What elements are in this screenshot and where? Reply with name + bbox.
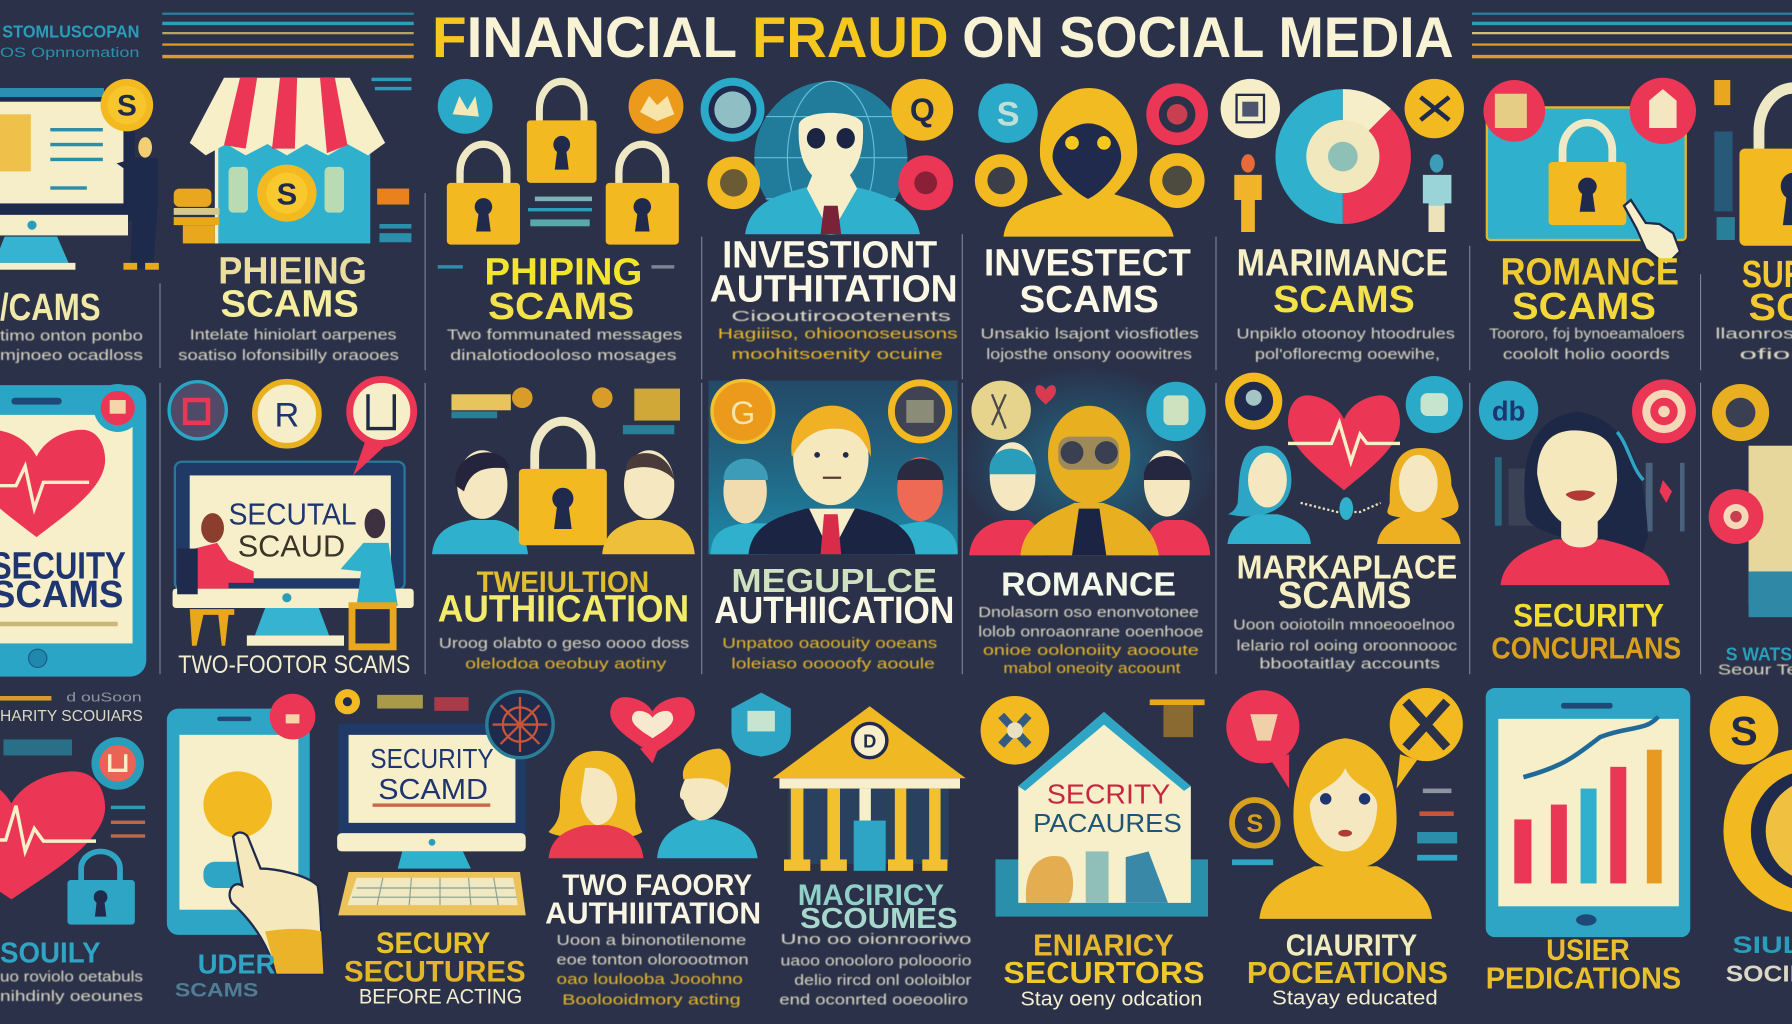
icon badges	[1225, 373, 1463, 433]
small lines	[438, 197, 674, 269]
heading: SCAMS	[1273, 278, 1415, 320]
icon: red bubble	[1226, 690, 1299, 789]
description: lolob onroaonrane ooenhooe	[978, 625, 1203, 641]
icon: woman	[1259, 738, 1432, 919]
panel: row 2 col 1 phone heart	[0, 384, 146, 677]
heading	[710, 233, 958, 310]
heading: SCAMS	[1019, 278, 1159, 320]
panel: row 1 col 7 lock and cursor	[1483, 78, 1696, 363]
text	[1718, 644, 1792, 678]
description: llaonrosn	[1715, 326, 1792, 342]
heading: INVESTECT	[984, 241, 1191, 283]
heading: TWEIULTION	[477, 566, 649, 599]
heading: SECURY	[376, 927, 490, 960]
icon: phone	[0, 385, 146, 677]
description: Two fommunated messages	[447, 327, 682, 343]
top-left caption: STOMLUSCOPAN	[2, 22, 139, 42]
icon: badge	[91, 737, 144, 790]
heading	[438, 566, 689, 630]
icon: house text: SECRITY	[1047, 778, 1170, 809]
icon badges	[971, 381, 1206, 441]
small bars	[3, 739, 145, 838]
top text: d ouSoon	[66, 691, 142, 705]
icon: screen text	[229, 497, 357, 564]
icon: coin: S	[1730, 708, 1758, 754]
icon badges: db	[1492, 396, 1525, 427]
description	[439, 636, 689, 673]
icon badges	[1479, 379, 1696, 443]
panel: row 2 col 3 lock and people	[432, 387, 695, 673]
panel: row 2 col 5 masked villain	[957, 366, 1219, 677]
description: Uno oo oionrooriwo	[781, 932, 971, 948]
heading: SCAMS	[221, 283, 359, 325]
label: TWO-FOOTOR SCAMS	[178, 651, 410, 679]
description	[557, 933, 749, 1009]
heading	[1486, 934, 1681, 996]
icon: store: S	[277, 177, 297, 212]
heading: SCAMS	[488, 285, 634, 327]
heading: SIUL	[1733, 932, 1792, 959]
heading	[485, 251, 642, 327]
icon: masked figure	[1021, 406, 1159, 555]
label: Stayay educated	[1272, 987, 1438, 1010]
top-left caption: OS Opnnomation	[0, 45, 139, 60]
icon badges: R	[274, 396, 299, 434]
panel: row 1 col 5 hooded figure	[975, 83, 1208, 363]
description: Uoon ooiotoiln mnoeooelnoo	[1233, 618, 1455, 634]
top-left caption	[0, 22, 139, 60]
heading: AUTHIICATION	[714, 589, 954, 631]
panel: row 2 col 2 monitor	[169, 379, 414, 679]
label: Stay oeny odcation	[1021, 988, 1202, 1011]
description	[0, 970, 143, 1005]
heading: USIER	[1546, 934, 1630, 967]
chart: trend line	[1523, 717, 1658, 777]
icon badges	[1483, 78, 1696, 144]
icon: large ring	[1723, 749, 1792, 913]
icon: screen text: SECUTAL	[229, 497, 357, 532]
icon: padlock	[1549, 123, 1626, 225]
heading: ENIARICY	[1033, 927, 1174, 962]
teal backdrop	[709, 381, 958, 554]
icon: padlock right	[606, 144, 679, 245]
heading: SCAMS	[1278, 574, 1411, 616]
description	[1233, 618, 1458, 673]
icon badges	[975, 83, 1208, 208]
icon: house	[995, 712, 1208, 917]
icon: screen	[1487, 107, 1686, 240]
panel: row 2 col 4 businessman	[709, 381, 958, 673]
heading	[1247, 927, 1448, 990]
heading: ROMANCE	[1001, 566, 1176, 603]
description: Toororo, foj bynoeamaloers	[1489, 326, 1685, 342]
description: Unpatoo oaoouity ooeans	[722, 636, 937, 652]
side bars	[1232, 789, 1457, 865]
description: uo roviolo oetabuls	[0, 970, 143, 986]
small icons	[451, 387, 680, 434]
description: Unpiklo otoonoy htoodrules	[1237, 326, 1455, 342]
heading: SCOUMES	[800, 903, 958, 935]
icon: lower tint	[1749, 571, 1792, 617]
description: delio rircd onl ooloiblor	[794, 973, 971, 989]
heading: SECUTURES	[344, 956, 526, 989]
icon: heart	[1288, 395, 1400, 490]
heading: SOUILY	[0, 937, 101, 969]
panel: row 3 col 3 monitor keyboard	[335, 689, 553, 1008]
heading: SCAMS	[1512, 285, 1656, 327]
description	[1715, 326, 1792, 363]
panel: row 1 col 4 impersonator	[701, 78, 958, 363]
icon: cream panel	[1749, 446, 1792, 606]
icon badges: Q	[910, 92, 935, 128]
heading: AUTHITATION	[710, 268, 958, 310]
icon: screen text	[370, 743, 494, 807]
panel: row 3 col 9	[1710, 696, 1792, 987]
description: Uoon a binonotilenome	[557, 933, 746, 949]
heading: MEGUPLCE	[731, 563, 937, 600]
icon: coin	[203, 771, 272, 838]
text: Seour Te	[1718, 662, 1792, 678]
heading	[0, 544, 126, 615]
icon: figures	[1234, 154, 1451, 232]
side icons	[174, 78, 411, 243]
description: uaoo onooloro polooorio	[781, 954, 971, 970]
heading: PEDICATIONS	[1486, 961, 1681, 996]
description: Unsakio lsajont viosfiotles	[981, 326, 1199, 342]
icon: badge	[94, 384, 142, 432]
chart: bars	[1514, 750, 1662, 883]
icon: woman right	[1377, 448, 1461, 544]
icon: coin ring: S	[1246, 810, 1263, 838]
icon: coin	[1710, 696, 1778, 765]
icon: central man	[749, 406, 915, 554]
icon: house text	[1033, 778, 1182, 838]
description: Boolooidmory acting	[562, 993, 741, 1009]
icon: teal shield	[731, 693, 791, 757]
icon: monitor	[0, 88, 135, 270]
line	[0, 622, 118, 626]
panel: row 1 col 1 monitor	[0, 79, 159, 364]
description: olelodoa oeobuy aotiny	[465, 657, 667, 673]
icon: masked person	[745, 113, 920, 234]
description	[981, 326, 1199, 363]
panel: row 2 col 8	[1709, 384, 1792, 678]
description: oao loulooba Jooohno	[557, 972, 743, 988]
description: ofion	[1739, 347, 1792, 363]
icon: side men	[969, 442, 1210, 555]
icon badges	[1221, 79, 1464, 138]
icon badges	[712, 381, 949, 442]
icon: woman	[1501, 411, 1670, 585]
heading	[344, 927, 526, 989]
small icons	[335, 689, 469, 714]
icon: woman	[549, 751, 643, 858]
description	[1489, 326, 1685, 363]
description	[718, 309, 958, 363]
heading	[545, 869, 761, 930]
icon: hand	[230, 833, 323, 974]
icon badges	[169, 379, 414, 475]
heading	[714, 563, 954, 631]
heading: AUTHIICATION	[438, 588, 689, 630]
description	[722, 636, 937, 673]
title: FINANCIAL	[432, 6, 737, 70]
title	[432, 6, 1454, 70]
description: eoe tonton oloroootmon	[557, 953, 749, 969]
heading: AUTHIIITATION	[545, 895, 761, 930]
heading: POCEATIONS	[1247, 955, 1448, 990]
icon: padlock	[1739, 88, 1792, 246]
icon: phone	[167, 709, 310, 935]
icon: bank	[773, 706, 966, 871]
panel: row 3 col 4 couple	[545, 693, 791, 1009]
description: end oconrted ooeooliro	[779, 993, 968, 1009]
heading	[1491, 597, 1681, 665]
header stripes left	[162, 13, 414, 58]
panel: row 3 col 5 bank	[773, 706, 971, 1009]
icon: keyboard	[338, 872, 526, 915]
icon: bank: D	[863, 730, 876, 751]
description	[178, 327, 399, 364]
label: SCAMS	[175, 980, 258, 1002]
heading: CIAURITY	[1286, 927, 1418, 962]
heading: INVESTIONT	[722, 233, 937, 275]
heading: PHIEING	[218, 249, 367, 291]
icon: screen text: SECURITY	[370, 743, 494, 774]
description	[1237, 326, 1455, 363]
title: ON SOCIAL MEDIA	[962, 6, 1454, 70]
heading: MARIMANCE	[1237, 241, 1448, 283]
description: pol'oflorecmg ooewihe,	[1255, 347, 1440, 363]
panel: row 3 col 7 woman	[1226, 688, 1463, 1010]
icon: side people	[711, 457, 958, 554]
description: mabol oneoity acoount	[1003, 661, 1182, 677]
dividers	[160, 193, 1701, 674]
icon: screen text: SCAMD	[378, 774, 488, 806]
icon: woman left	[1227, 446, 1311, 544]
description	[779, 932, 971, 1009]
icon: badge	[270, 694, 315, 739]
icon: coin	[101, 79, 153, 131]
icon: teal lock	[67, 851, 135, 925]
icon: padlock top	[527, 81, 597, 183]
icon: coin ring	[1232, 800, 1278, 846]
heading: SECURITY	[1513, 597, 1664, 633]
description: timo onton ponbo	[0, 329, 143, 345]
panel: row 2 col 7 woman	[1479, 379, 1696, 665]
description: Hagiiiso, ohioonoseusons	[718, 326, 958, 342]
chart: donut	[1275, 89, 1411, 224]
icon: man left	[432, 450, 528, 554]
top text: HARITY SCOUIARS	[0, 708, 143, 725]
icon: connector	[1301, 497, 1381, 520]
icon badges: G	[730, 395, 755, 431]
heading	[1726, 932, 1792, 987]
icon: house text: PACAURES	[1033, 808, 1182, 838]
description: nihdinly oeounes	[0, 989, 143, 1005]
icon: padlock	[519, 421, 607, 545]
panel: row 3 col 2 phone	[167, 694, 323, 1002]
heading	[1237, 241, 1448, 320]
icon: hand cuff	[265, 929, 323, 974]
icon: X badge	[981, 696, 1049, 765]
description: loleiaso ooooofy aooule	[731, 657, 935, 673]
icon: man right	[602, 450, 695, 554]
description: Dnolasorn oso enonvotonee	[978, 605, 1199, 621]
icon: people	[177, 509, 398, 647]
heading	[1237, 549, 1457, 616]
title: FRAUD	[752, 6, 949, 70]
panel: row 3 col 8 tablet chart	[1486, 688, 1690, 996]
header stripes right	[1472, 13, 1792, 58]
description: soatiso lofonsibilly oraooes	[178, 348, 399, 364]
label: UDER	[198, 949, 276, 980]
heading	[218, 249, 367, 325]
label	[175, 949, 276, 1002]
icon badges	[701, 78, 953, 210]
icon: coin: S	[117, 89, 137, 122]
description: dinalotiodooloso mosages	[450, 348, 677, 364]
heading	[1003, 927, 1205, 990]
heading: /CAMS	[0, 286, 101, 328]
description: bbootaitlay accounts	[1259, 657, 1440, 673]
icon: X bubble	[1390, 688, 1463, 789]
description	[978, 605, 1203, 677]
description: moohitsoenity ocuine	[731, 347, 943, 363]
description: Intelate hiniolart oarpenes	[190, 327, 397, 343]
heading	[1501, 251, 1679, 327]
panel: row 1 col 6 donut	[1221, 79, 1464, 363]
icon: screen text: SCAUD	[238, 529, 345, 564]
description: Uroog olabto o geso oooo doss	[439, 636, 689, 652]
panel: row 3 col 6 house	[981, 696, 1208, 1011]
heading	[798, 879, 958, 935]
icon badges: S	[997, 96, 1019, 134]
top text	[0, 691, 143, 725]
icon: monitor	[173, 462, 414, 646]
label: BEFORE ACTING	[359, 983, 522, 1008]
heading: SECURTORS	[1003, 955, 1205, 990]
side icon	[1714, 80, 1735, 240]
icon: hooded figure	[1003, 88, 1174, 237]
description	[0, 329, 143, 364]
panel: row 1 col 8	[1714, 80, 1792, 363]
description: Ciooutiroootenents	[731, 309, 951, 325]
heading: CONCURLANS	[1491, 630, 1681, 665]
panel: row 1 col 2 storefront	[174, 78, 411, 364]
heading	[984, 241, 1191, 320]
description: coololt holio ooords	[1503, 347, 1670, 363]
panel: row 3 col 1 heart lock	[0, 691, 145, 1005]
heading: MARKAPLACE	[1237, 549, 1457, 586]
icon: orange badge	[629, 79, 683, 134]
icon: globe	[754, 81, 907, 234]
icon: heart bubble	[610, 697, 695, 763]
icon: padlock left	[447, 144, 520, 245]
icon: store	[190, 78, 385, 243]
description: lojosthe onsony ooowitres	[986, 347, 1192, 363]
icon: monitor	[337, 723, 526, 869]
icon: glyph	[1150, 699, 1205, 737]
icon: tablet	[1486, 688, 1690, 937]
heading: MACIRICY	[798, 879, 944, 912]
icon: heart	[0, 771, 105, 899]
icon: hand cursor	[1624, 200, 1680, 265]
heading: ROMANCE	[1501, 251, 1679, 293]
icon badges	[1709, 384, 1769, 544]
description: lelario rol ooing oroonnoooc	[1237, 638, 1458, 654]
heading: TWO FAOORY	[562, 869, 752, 902]
icon: heart	[0, 430, 105, 537]
icon: teal badge	[438, 79, 493, 134]
heading	[1742, 253, 1792, 328]
description: mjnoeo ocadloss	[0, 348, 143, 364]
icon: man	[657, 749, 758, 858]
icon: presenter	[117, 137, 159, 270]
teal backdrop	[957, 366, 1219, 560]
panel: row 1 col 3 padlocks	[438, 79, 683, 364]
description	[447, 327, 682, 364]
description: onioe oolonoiity aoooute	[983, 643, 1199, 659]
side details	[1495, 457, 1685, 531]
heading: PHIPING	[485, 251, 642, 293]
panel: row 2 col 6 couple heart	[1225, 373, 1463, 673]
icon: spider web badge	[487, 691, 553, 758]
